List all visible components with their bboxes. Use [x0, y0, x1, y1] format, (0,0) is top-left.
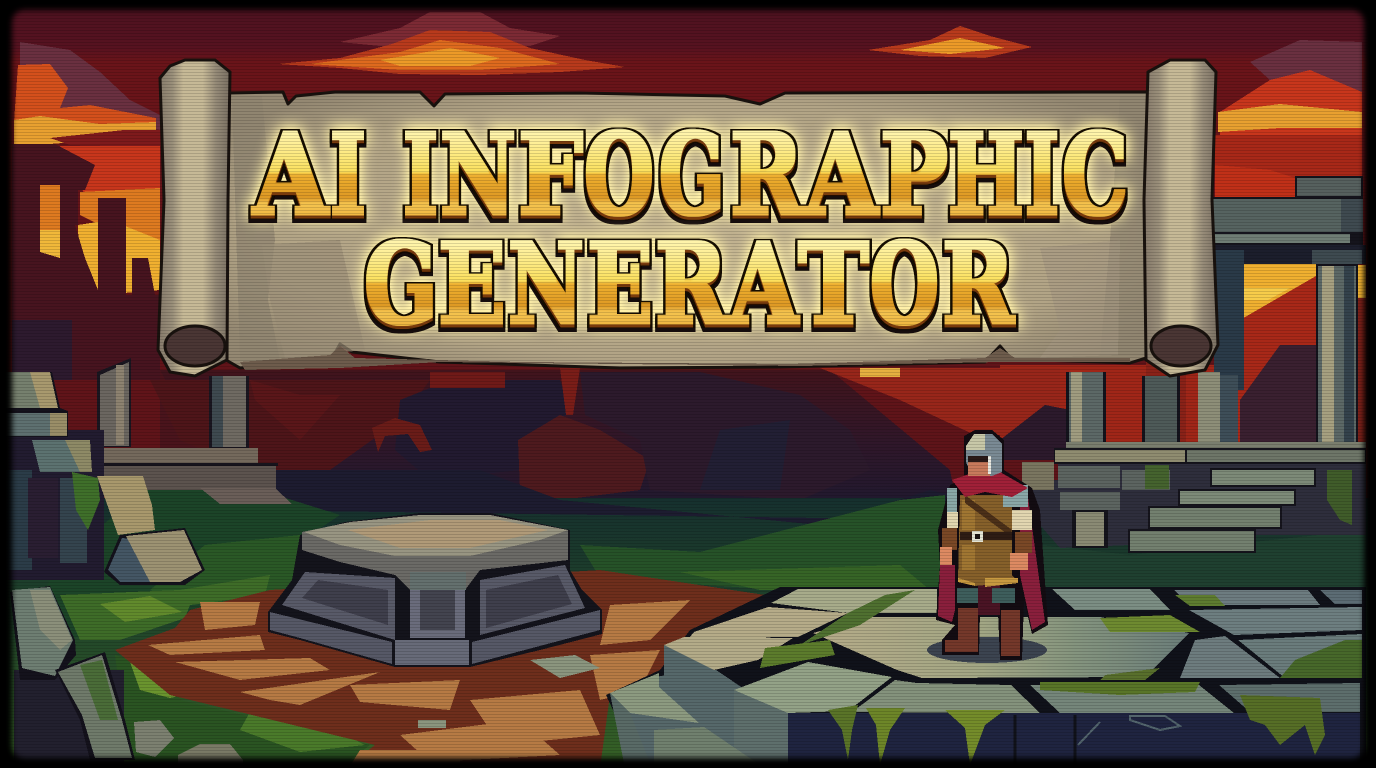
knight tunic — [958, 495, 1018, 586]
rock pile left — [4, 372, 205, 585]
title line one: P — [880, 110, 948, 241]
title line two: A — [728, 220, 800, 350]
title line two: T — [798, 220, 869, 350]
sunset clouds — [14, 12, 1362, 295]
title line one: I — [1025, 110, 1059, 241]
sky — [0, 0, 1376, 520]
rocks bottom left — [10, 586, 243, 768]
moss on floor — [800, 590, 915, 645]
pedestal base — [270, 612, 392, 664]
pedestal top — [302, 515, 568, 590]
title line one: O — [584, 110, 654, 241]
title line two: O — [870, 220, 939, 350]
stone floor — [606, 587, 1366, 768]
knight outline — [936, 430, 1048, 660]
third row slabs — [664, 637, 793, 670]
knight — [927, 430, 1048, 663]
left temple silhouette — [12, 144, 160, 380]
right ruins colonnade — [1020, 176, 1366, 553]
knight collar — [952, 472, 1028, 497]
title line one: A — [252, 110, 330, 241]
title line one: I — [330, 110, 366, 241]
knight cape — [1020, 497, 1045, 630]
grass — [40, 486, 1366, 768]
dirt patches — [148, 600, 690, 766]
knight arms — [947, 488, 957, 513]
stone pedestal — [268, 513, 602, 667]
right scroll roll — [1144, 60, 1218, 376]
second row slabs — [689, 607, 848, 638]
back row slabs — [771, 589, 937, 613]
title line one: R — [730, 110, 804, 241]
knight belt — [960, 532, 1012, 540]
scroll parchment — [226, 92, 1148, 368]
floor cracks — [1015, 715, 1075, 768]
title line two: R — [655, 220, 728, 350]
knight helmet — [966, 434, 1002, 476]
scroll banner — [158, 60, 1218, 376]
left roll curl — [165, 326, 225, 366]
small path stones — [418, 655, 600, 728]
right sky red and glow — [1000, 262, 1366, 455]
parchment stains — [232, 96, 1146, 370]
ground base — [0, 498, 1376, 768]
far hills — [150, 368, 1070, 520]
right roll curl — [1151, 326, 1211, 366]
knight legs — [957, 588, 978, 603]
navy slab fronts — [778, 713, 1360, 768]
left scroll roll — [158, 60, 230, 376]
title line one: I — [403, 110, 438, 241]
title line two: N — [508, 220, 584, 350]
left slab fronts — [612, 670, 780, 768]
dark hills over the field — [240, 470, 970, 525]
title line two: E — [587, 220, 653, 350]
pedestal side panels — [282, 572, 395, 640]
title line two: R — [942, 220, 1015, 350]
title line one: G — [659, 110, 725, 241]
column ruins left — [92, 358, 292, 504]
title line two: G — [364, 220, 438, 350]
title line one: H — [948, 110, 1024, 241]
title line one: A — [804, 110, 880, 241]
dirt path — [115, 570, 765, 768]
title line one: F — [518, 110, 583, 241]
title line one: C — [1062, 110, 1128, 241]
title line two: E — [438, 220, 506, 350]
title line one: N — [440, 110, 516, 241]
